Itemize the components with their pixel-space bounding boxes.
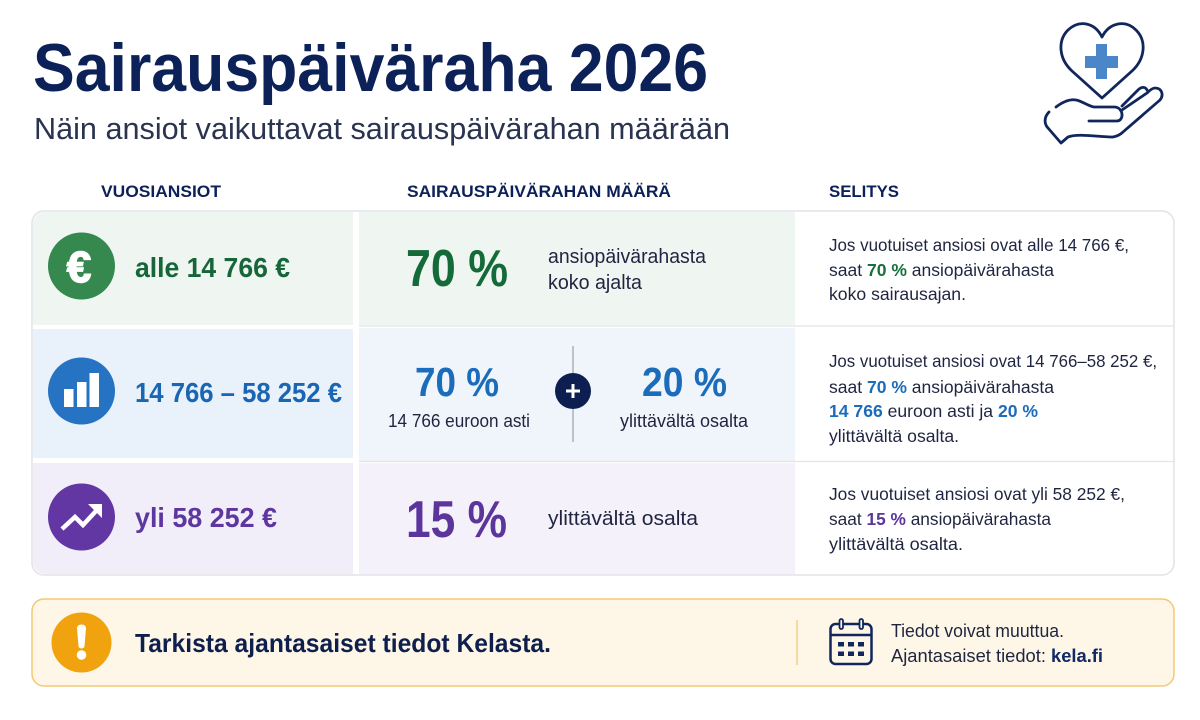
- row 2 left amount: 14 766 euroon asti: [388, 410, 530, 431]
- explanation row 2: Jos vuotuiset ansiosi ovat 14 766–58 252 €,: [829, 351, 1157, 371]
- explanation row 2: 14 766 euroon asti ja 20 %: [829, 401, 1038, 421]
- icon: euro: €: [67, 243, 91, 292]
- row 2 right amount: ylittävältä osalta: [620, 410, 749, 431]
- column heading: vuosiansiot: VUOSIANSIOT: [101, 182, 222, 201]
- column heading: selitys: SELITYS: [829, 182, 899, 201]
- row 1 description: [548, 246, 707, 294]
- icon: warning: [52, 612, 112, 672]
- explanation row 1: saat 70 % ansiopäivärahasta: [829, 260, 1054, 280]
- callout heading: Tarkista ajantasaiset tiedot Kelasta.: [135, 628, 551, 658]
- row 3 percentage: 15 %: [406, 491, 507, 549]
- explanation row 3: ylittävältä osalta.: [829, 534, 963, 554]
- icon: euro: [48, 232, 115, 300]
- panel: table: [32, 211, 1174, 575]
- explanation row 3: [829, 484, 1125, 554]
- callout text: Ajantasaiset tiedot: kela.fi: [891, 646, 1103, 666]
- icon: bar chart: [48, 358, 115, 424]
- row backgrounds: purple: [33, 463, 795, 574]
- column heading: määrä: SAIRAUSPÄIVÄRAHAN MÄÄRÄ: [407, 182, 671, 201]
- row 1 percentage: 70 %: [406, 240, 508, 298]
- range: alle: alle 14 766 €: [135, 252, 290, 283]
- range: keski: 14 766 – 58 252 €: [135, 377, 342, 408]
- row 2 right amount: 20 %: [642, 359, 727, 405]
- row backgrounds: green: [33, 212, 795, 325]
- row 1 description: ansiopäivärahasta: [548, 246, 707, 268]
- callout: [32, 599, 1174, 686]
- explanation row 3: saat 15 % ansiopäivärahasta: [829, 509, 1051, 529]
- icon: calendar: [830, 619, 872, 664]
- row 3 description: ylittävältä osalta: [548, 508, 699, 530]
- plus symbol: [555, 346, 591, 442]
- row dividers: [359, 326, 1174, 462]
- row 1 description: koko ajalta: [548, 272, 643, 294]
- callout text: [891, 621, 1103, 666]
- explanation row 2: [829, 351, 1157, 446]
- explanation row 1: [829, 235, 1129, 304]
- row backgrounds: blue: [33, 328, 795, 461]
- subtitle: Näin ansiot vaikuttavat sairauspäivärahan määrään: [34, 111, 730, 146]
- callout text: Tiedot voivat muuttua.: [891, 621, 1064, 641]
- icon: heart in hand: [1045, 24, 1162, 143]
- explanation row 2: ylittävältä osalta.: [829, 426, 959, 446]
- explanation row 2: saat 70 % ansiopäivärahasta: [829, 377, 1054, 397]
- explanation row 1: Jos vuotuiset ansiosi ovat alle 14 766 €,: [829, 235, 1129, 255]
- row 2 left amount: 70 %: [415, 359, 499, 405]
- row 2 left amount: [388, 359, 530, 431]
- icon: trend arrow: [48, 484, 115, 550]
- explanation row 3: Jos vuotuiset ansiosi ovat yli 58 252 €,: [829, 484, 1125, 504]
- explanation row 1: koko sairausajan.: [829, 284, 966, 304]
- row 2 right amount: [620, 359, 749, 431]
- title: Sairauspäiväraha 2026: [33, 30, 708, 106]
- range: yli: yli 58 252 €: [135, 502, 277, 533]
